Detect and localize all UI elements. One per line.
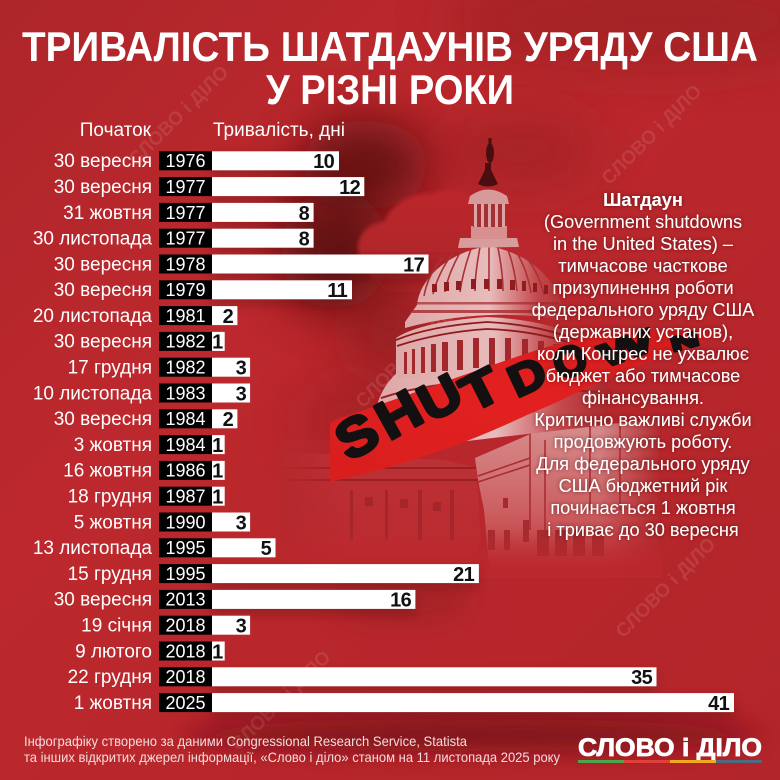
row: 1 жовтня 2025: 41: [708, 693, 730, 715]
illustration: Capitol building: [280, 138, 662, 580]
footnote: sources: Інфографіку створено за даними Congressional Research Service, Statista: [24, 734, 467, 749]
row: 9 лютого 2018: 1: [212, 641, 223, 663]
row: 15 грудня 1995: 1995: [165, 564, 206, 584]
ribbon lettering: W: [594, 322, 659, 374]
row: 17 грудня 1982: 1982: [165, 358, 206, 378]
title: [22, 23, 758, 113]
ribbon lettering: N: [668, 327, 701, 356]
text block: definition of shutdown: коли Конгрес не ухвалює: [537, 344, 749, 364]
text block: definition of shutdown: тимчасове часткове: [558, 256, 728, 276]
row: 13 листопада 1995: 5: [261, 538, 272, 560]
watermarks: СЛОВО і ДІЛО: [598, 81, 706, 189]
lantern: [458, 190, 519, 248]
row: 13 листопада 1995: 13 листопада: [33, 538, 152, 559]
row: 30 листопада 1977: 8: [299, 228, 310, 250]
ribbon lettering: O: [546, 333, 594, 389]
row: 16 жовтня 1986: 1986: [165, 461, 206, 481]
watermarks: [125, 62, 720, 755]
text block: definition of shutdown: продовжують роботу.: [554, 432, 732, 452]
row: 3 жовтня 1984: 1: [212, 435, 223, 457]
ribbon lettering: S: [325, 401, 389, 473]
row: 10 листопада 1983: 1983: [165, 383, 206, 403]
row: 20 листопада 1981: 2: [223, 306, 234, 328]
clouds: [358, 190, 480, 300]
row: 30 вересня 1984: 2: [223, 409, 234, 431]
row: 16 жовтня 1986: 16 жовтня: [63, 461, 152, 482]
base drum: [378, 372, 612, 450]
row: 5 жовтня 1990: [74, 512, 250, 534]
row: 30 вересня 1977: 1977: [165, 177, 206, 197]
building edge fades: [280, 415, 662, 580]
left wing: [280, 452, 481, 575]
row: 22 грудня 2018: 22 грудня: [68, 667, 152, 688]
row: 30 вересня 1977: 12: [339, 177, 361, 199]
watermarks: СЛОВО і ДІЛО: [227, 647, 335, 755]
row: 30 листопада 1977: 1977: [165, 228, 206, 248]
row: 3 жовтня 1984: [74, 435, 225, 457]
row: 30 вересня 1976: 10: [313, 151, 335, 173]
footnote: sources: та інших відкритих джерел інформації, «Слово і діло» станом на 11 листопада 2025 року: [24, 750, 560, 765]
row: 9 лютого 2018: 9 лютого: [75, 641, 152, 662]
row: 30 вересня 1979: 30 вересня: [54, 280, 152, 301]
column headers: Початок: [80, 120, 152, 141]
row: 1 жовтня 2025: [74, 693, 734, 715]
row: 30 вересня 2013: 30 вересня: [54, 590, 152, 611]
row: 30 вересня 1978: 30 вересня: [54, 254, 152, 275]
row: 18 грудня 1987: 18 грудня: [68, 486, 152, 508]
row: 30 вересня 1977: 30 вересня: [54, 177, 152, 198]
row: 22 грудня 2018: 2018: [165, 667, 206, 687]
row: 22 грудня 2018: 35: [631, 667, 653, 689]
text block: definition of shutdown: Для федерального уряду: [536, 454, 751, 474]
row: 20 листопада 1981: 1981: [165, 306, 206, 326]
row: 20 листопада 1981: 20 листопада: [33, 306, 152, 327]
row: 15 грудня 1995: 21: [453, 564, 475, 586]
text block: definition of shutdown: Критично важливі служби: [534, 410, 752, 430]
text block: definition of shutdown: призупинення роботи: [552, 278, 734, 298]
ribbon lettering: D: [501, 347, 554, 407]
row: 30 вересня 2013: 16: [390, 590, 412, 612]
statue: [478, 138, 498, 186]
row: 3 жовтня 1984: 1984: [165, 435, 206, 455]
row: 18 грудня 1987: [68, 486, 225, 508]
text block: definition of shutdown: [532, 190, 755, 540]
row: 10 листопада 1983: [33, 383, 250, 405]
right wing: [475, 420, 660, 575]
watermarks: СЛОВО і ДІЛО: [125, 62, 233, 170]
row: 30 вересня 1976: [54, 151, 339, 173]
ribbon lettering: T: [451, 356, 510, 423]
row: 5 жовтня 1990: 3: [236, 512, 247, 534]
row: 30 вересня 1982: 1982: [165, 332, 206, 352]
row: 30 вересня 1977: [54, 177, 364, 199]
watermarks: СЛОВО і ДІЛО: [352, 304, 460, 412]
row: 20 листопада 1981: [33, 306, 237, 328]
row: 30 вересня 1979: 1979: [165, 280, 206, 300]
column headers: Тривалість, дні: [213, 120, 345, 141]
text block: definition of shutdown: федерального уряду США: [532, 300, 755, 320]
row: 17 грудня 1982: 3: [236, 358, 247, 380]
text block: definition of shutdown: (державних установ),: [553, 322, 733, 342]
row: 19 січня 2018: [81, 616, 250, 638]
row: 30 вересня 1976: 30 вересня: [54, 151, 152, 172]
text block: definition of shutdown: починається 1 жовтня: [550, 498, 736, 518]
row: 30 вересня 2013: 2013: [165, 590, 206, 610]
text block: definition of shutdown: і триває до 30 вересня: [547, 520, 739, 540]
row: 15 грудня 1995: [68, 564, 479, 586]
row: 10 листопада 1983: 10 листопада: [33, 383, 152, 404]
row: 30 вересня 1982: [54, 332, 225, 354]
row: 1 жовтня 2025: 2025: [165, 693, 206, 713]
row: 17 грудня 1982: [68, 358, 250, 380]
row: 3 жовтня 1984: 3 жовтня: [74, 435, 152, 456]
row: 31 жовтня 1977: 1977: [165, 203, 206, 223]
title: У РІЗНІ РОКИ: [266, 66, 514, 113]
text block: definition of shutdown: in the United States) –: [553, 234, 734, 254]
bar shadows: [212, 155, 734, 718]
row: 30 вересня 1984: [54, 409, 237, 431]
row: 5 жовтня 1990: 1990: [165, 512, 206, 532]
row: 9 лютого 2018: [75, 641, 225, 663]
row: 30 вересня 1979: [54, 280, 352, 302]
row: 31 жовтня 1977: [63, 203, 314, 225]
row: 30 вересня 1978: 17: [403, 254, 425, 276]
row: 30 вересня 1984: 30 вересня: [54, 409, 152, 430]
row: 30 вересня 1978: 1978: [165, 254, 206, 274]
main dome: [405, 246, 574, 328]
row: 19 січня 2018: 2018: [165, 616, 206, 636]
bar chart: [33, 151, 734, 718]
row: 30 вересня 1979: 11: [327, 280, 348, 302]
ribbon lettering: U: [408, 362, 472, 433]
row: 30 вересня 2013: [54, 590, 415, 612]
text block: definition of shutdown: бюджет або тимчасове: [546, 366, 740, 386]
text block: definition of shutdown: фінансування.: [582, 388, 704, 408]
row: 15 грудня 1995: 15 грудня: [68, 564, 152, 585]
watermarks: СЛОВО і ДІЛО: [612, 534, 720, 642]
row: 19 січня 2018: 19 січня: [81, 616, 152, 636]
row: 31 жовтня 1977: 31 жовтня: [63, 203, 152, 224]
row: 9 лютого 2018: 2018: [165, 641, 206, 661]
text block: definition of shutdown: США бюджетний рік: [559, 476, 728, 496]
row: 16 жовтня 1986: 1: [212, 461, 223, 483]
row: 5 жовтня 1990: 5 жовтня: [74, 512, 152, 533]
column headers: [80, 120, 345, 141]
row: 17 грудня 1982: 17 грудня: [68, 358, 152, 378]
row: 30 вересня 1976: 1976: [165, 151, 206, 171]
row: 22 грудня 2018: [68, 667, 656, 689]
row: 30 вересня 1984: 1984: [165, 409, 206, 429]
footnote: sources: [24, 734, 560, 765]
peristyle: [396, 317, 592, 378]
ribbon lettering: H: [366, 379, 433, 452]
row: 13 листопада 1995: [33, 538, 276, 560]
row: 30 вересня 1982: 30 вересня: [54, 332, 152, 353]
ribbon lettering: [325, 322, 701, 473]
row: 18 грудня 1987: 1: [212, 486, 223, 508]
row: 13 листопада 1995: 1995: [165, 538, 206, 558]
row: 31 жовтня 1977: 8: [299, 203, 310, 225]
text block: definition of shutdown: (Government shutdowns: [544, 212, 742, 232]
row: 19 січня 2018: 3: [236, 616, 247, 638]
row: 16 жовтня 1986: [63, 461, 225, 483]
row: 30 вересня 1978: [54, 254, 428, 276]
row: 10 листопада 1983: 3: [236, 383, 247, 405]
logo: Слово і Діло: СЛОВО і ДІЛО: [578, 734, 762, 762]
row: 30 вересня 1982: 1: [212, 332, 223, 354]
ribbon: shutdown tape: [325, 322, 724, 482]
row: 30 листопада 1977: [33, 228, 314, 250]
row: 30 листопада 1977: 30 листопада: [33, 228, 152, 250]
row: 18 грудня 1987: 1987: [165, 486, 206, 506]
row: 1 жовтня 2025: 1 жовтня: [74, 693, 152, 714]
text block: definition of shutdown: Шатдаун: [603, 190, 683, 210]
